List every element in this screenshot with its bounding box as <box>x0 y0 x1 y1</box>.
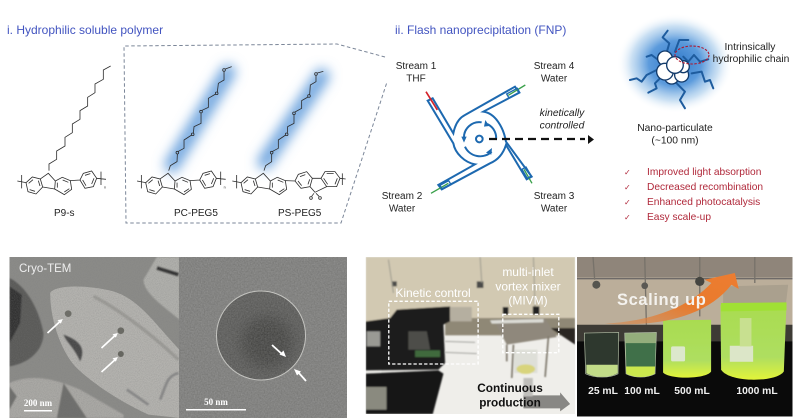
label: P9-s: P9-s <box>54 208 75 219</box>
vortex mixer diagram <box>426 85 532 193</box>
label: MIVM: multi-inlet <box>502 265 554 279</box>
label: nano-particulate: (~100 nm) <box>651 136 699 146</box>
label: 25 mL: 25 mL <box>588 386 618 397</box>
molecule: P9-s: n <box>104 186 106 190</box>
inner and outer arrows <box>272 345 306 381</box>
swirl arrows <box>464 122 482 138</box>
label: continuous production: production <box>479 396 541 410</box>
molecule: P9-s <box>17 66 111 195</box>
molecule: PC-PEG5 <box>137 67 232 195</box>
dashed arrow <box>489 135 594 144</box>
label: kinetically controlled: kinetically <box>540 108 584 119</box>
label: stream 3: Stream 3 <box>534 191 574 202</box>
dashed callout frame <box>124 44 387 223</box>
benefits list: Easy scale-up <box>647 212 711 223</box>
label: intrinsically hydrophilic chain: hydrophilic chain <box>713 54 790 65</box>
arrow: scaling up <box>605 273 739 324</box>
label: intrinsically hydrophilic chain: Intrinsically <box>725 42 775 53</box>
label: stream 2: Stream 2 <box>382 191 422 202</box>
benefits list <box>624 167 763 223</box>
beaker 1000 mL <box>723 285 788 305</box>
label: nano-particulate: Nano-particulate <box>637 123 713 134</box>
molecule: PS-PEG5 <box>232 71 346 199</box>
label: MIVM: (MIVM) <box>508 294 548 308</box>
panel: scaling up beakers photo <box>577 257 792 416</box>
beaker 25 mL <box>584 332 619 377</box>
scale bar: 200 nm: 200 nm <box>24 398 53 408</box>
arrow: continuous production <box>523 392 570 411</box>
label: stream 4: Stream 4 <box>534 61 574 72</box>
label: MIVM: vortex mixer <box>495 280 561 294</box>
scale bar: 50 nm <box>186 397 246 410</box>
label: continuous production: Continuous <box>477 381 543 395</box>
title: hydrophilic soluble polymer: i. Hydrophilic soluble polymer <box>7 23 163 37</box>
benefits list: ✓ <box>624 198 631 207</box>
inlet needles <box>426 92 437 110</box>
benefits list: ✓ <box>624 183 631 192</box>
label: stream 2: Water <box>389 204 416 214</box>
mixer walls <box>428 87 532 189</box>
arrows <box>48 319 118 372</box>
label: PC-PEG5: PC-PEG5 <box>174 208 218 219</box>
benefits list: ✓ <box>624 168 631 177</box>
benefits list: Decreased recombination <box>647 182 763 193</box>
label: PS-PEG5: PS-PEG5 <box>278 208 322 219</box>
particles <box>65 310 72 317</box>
beaker 500 mL <box>663 320 711 378</box>
fittings <box>440 88 531 189</box>
beaker 100 mL <box>625 332 656 377</box>
panel: cryo-TEM particle close-up <box>179 257 347 418</box>
label: stream 1: THF <box>406 74 426 84</box>
benefits list: ✓ <box>624 213 631 222</box>
label: scaling up: Scaling up <box>617 291 706 309</box>
label: kinetically controlled: controlled <box>540 120 585 132</box>
benefits list: Improved light absorption <box>647 167 761 178</box>
label: 1000 mL: 1000 mL <box>736 386 778 397</box>
title: flash nanoprecipitation: ii. Flash nanoprecipitation (FNP) <box>395 23 566 37</box>
label: stream 1: Stream 1 <box>396 61 436 72</box>
scale bar: 50 nm: 50 nm <box>204 397 228 407</box>
highlight: hydrophilic chain ellipse <box>675 46 709 64</box>
molecule: PC-PEG5: n <box>224 186 226 190</box>
label: kinetic control: Kinetic control <box>395 286 471 300</box>
PEG glow <box>265 76 322 162</box>
benefits list: Enhanced photocatalysis <box>647 197 760 208</box>
label: stream 4: Water <box>541 74 568 84</box>
nanoparticle illustration <box>617 13 733 113</box>
PEG glow <box>172 72 228 165</box>
panel: kinetic control photo <box>366 257 575 414</box>
label: stream 3: Water <box>541 204 568 214</box>
label: 100 mL: 100 mL <box>624 386 660 397</box>
label: 500 mL: 500 mL <box>674 386 710 397</box>
panel: cryo-TEM overview <box>10 257 180 418</box>
label: Cryo-TEM: Cryo-TEM <box>19 263 71 275</box>
